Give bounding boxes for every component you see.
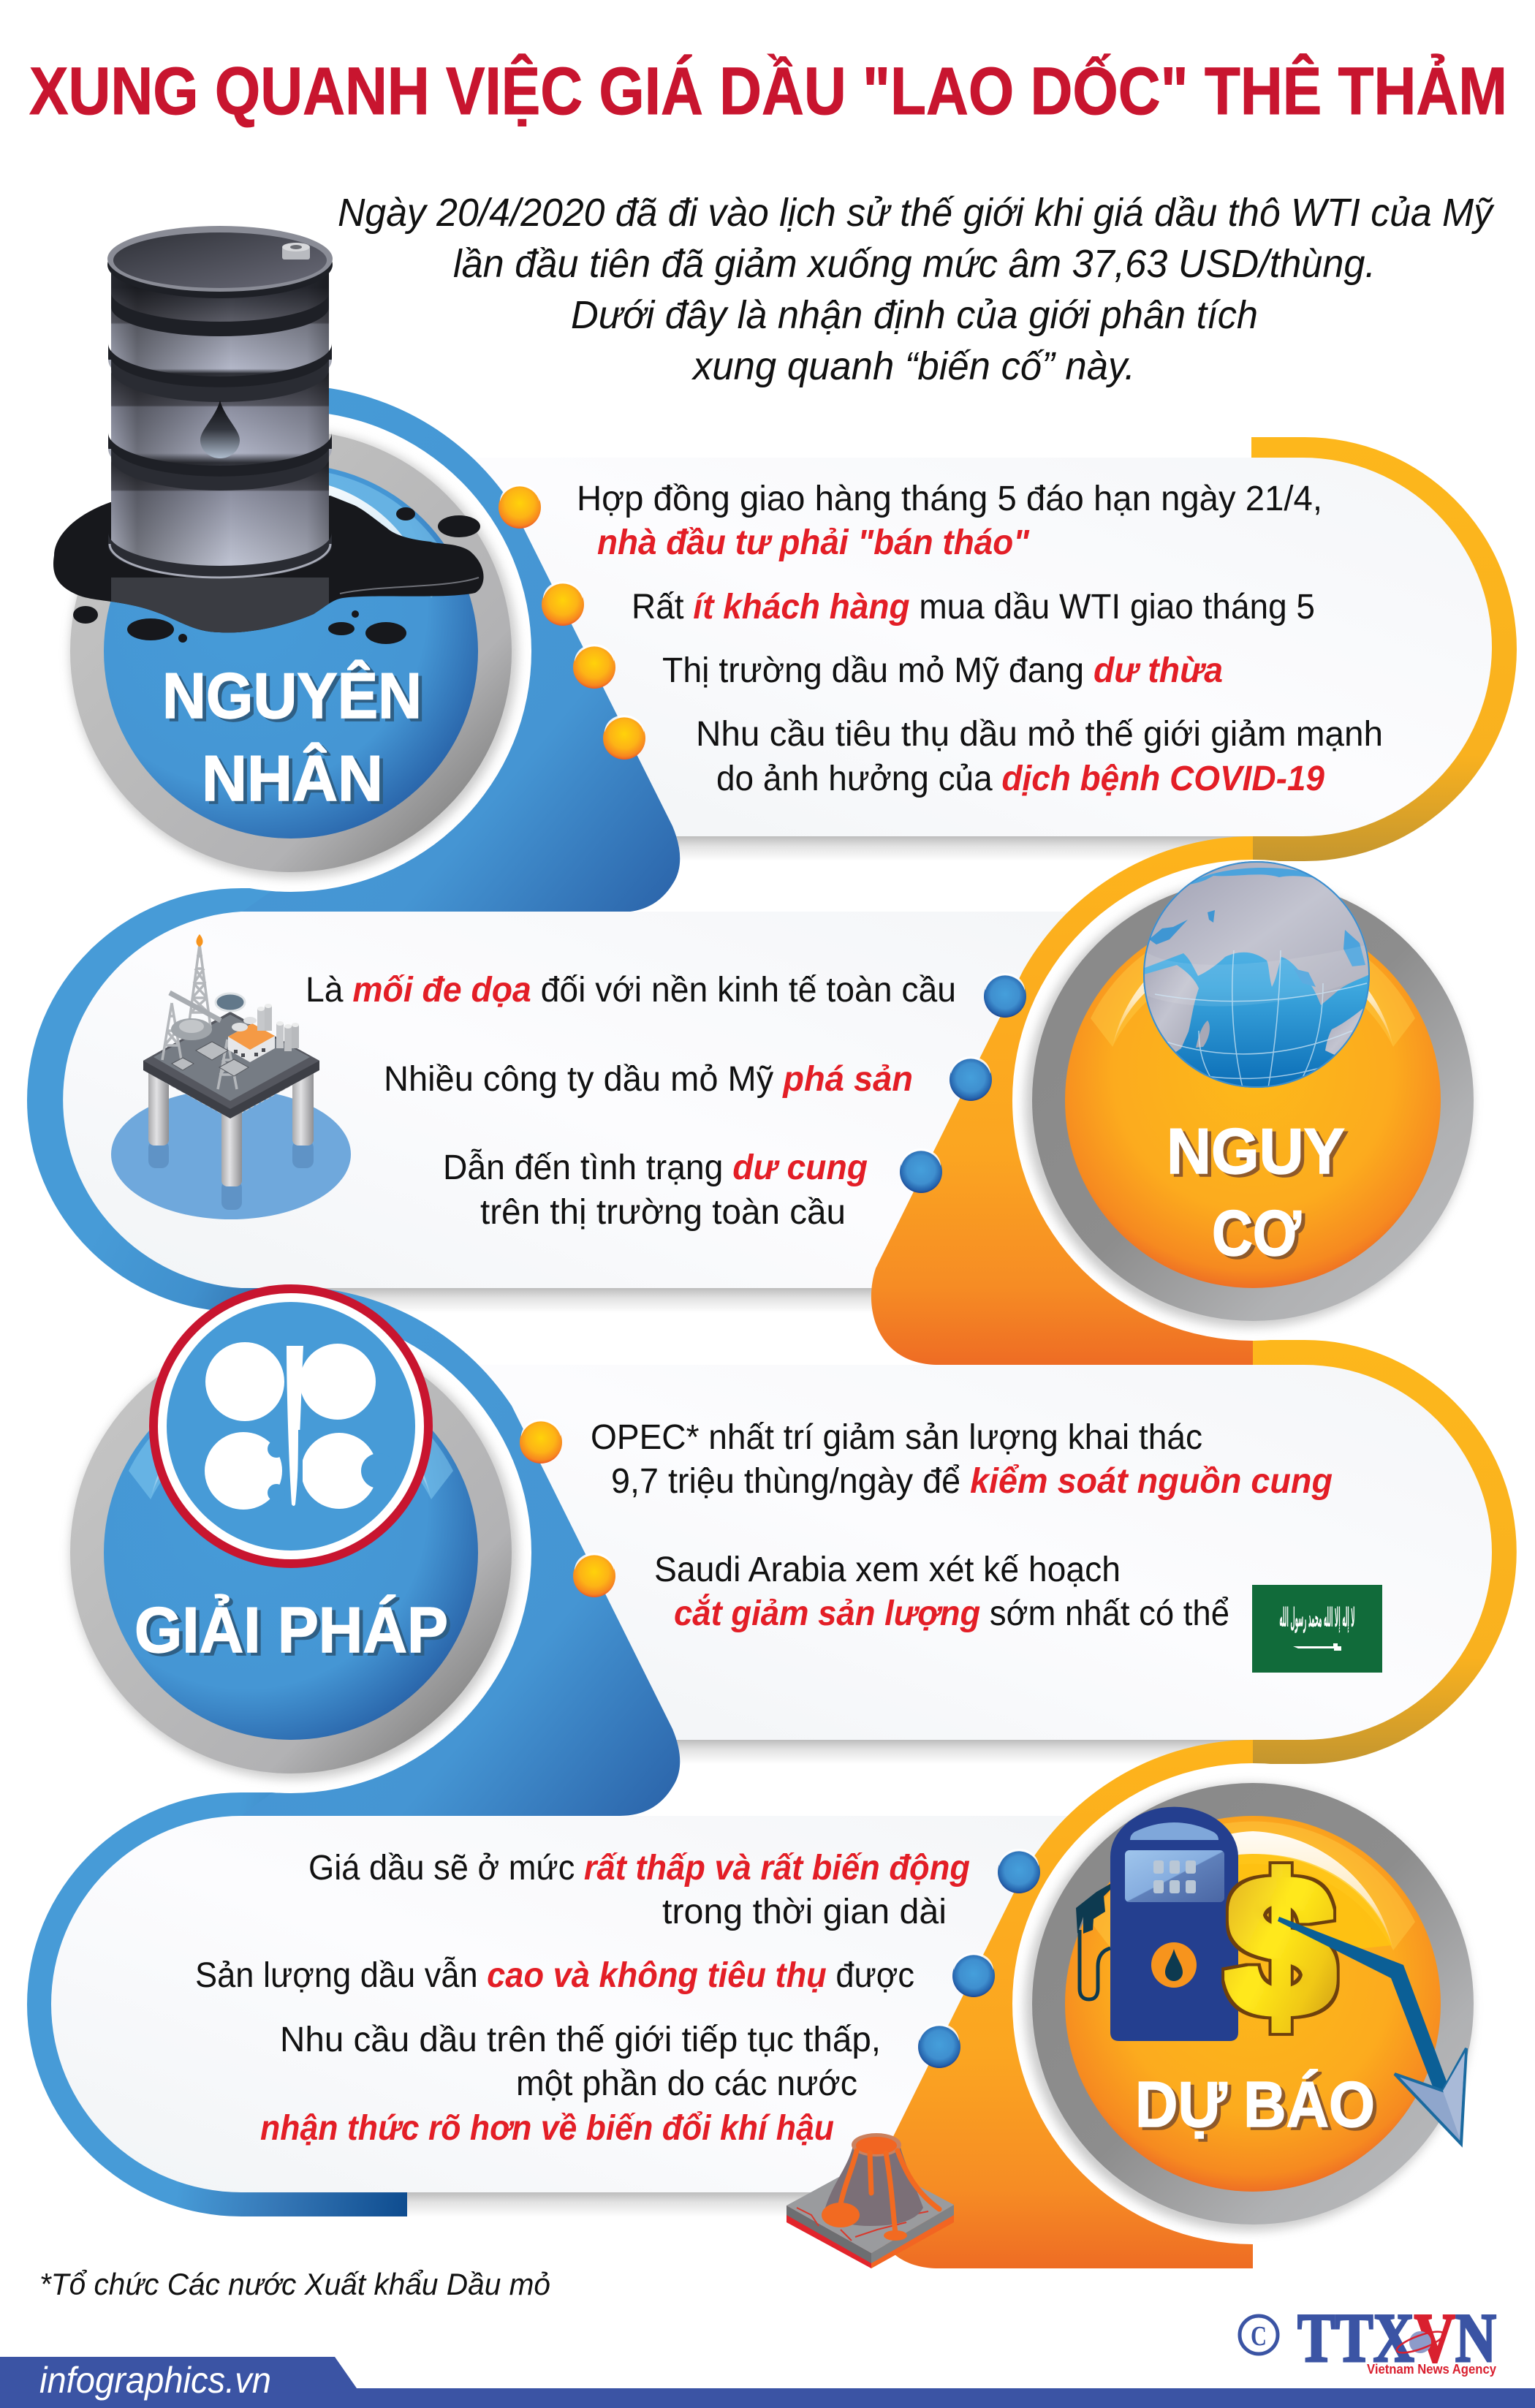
bullet list: risks [306,971,1026,1232]
bullet list: causes: Nhu cầu tiêu thụ dầu mỏ thế giới giảm mạnh [696,715,1383,754]
section: GIẢI PHÁP circle [50,1312,531,1793]
circle gloss [129,469,453,598]
circle gloss [1091,1822,1415,1960]
panel: solutions text background [468,1365,1492,1740]
bullet list: forecast [195,1849,1040,2148]
rig tanks [232,1004,299,1051]
gold outline: section 1 right edge [1250,437,1517,861]
bullet list: solutions: OPEC* nhất trí giảm sản lượng khai thác [591,1418,1202,1457]
bullet list: solutions: 9,7 triệu thùng/ngày để kiểm soát nguồn cung [611,1462,1333,1501]
bullet list: forecast: Sản lượng dầu vẫn cao và không tiêu thụ được [195,1955,914,1995]
bullet list: solutions: cắt giảm sản lượng sớm nhất có thể [674,1593,1229,1633]
panel outline: forecast blue band [27,1792,407,2216]
icon: fuel pump [1076,1807,1238,2041]
bullet list: risks: Là mối đe dọa đối với nền kinh tế toàn cầu [306,971,956,1010]
rig building [228,1023,275,1062]
section: DỰ BÁO circle [1012,1763,1493,2244]
bullet list: forecast: Nhu cầu dầu trên thế giới tiếp tục thấp, [280,2021,881,2059]
gold outline: section 3 right edge [1250,1340,1517,1764]
bullet list: solutions: Saudi Arabia xem xét kế hoạch [654,1551,1121,1589]
intro text block: Dưới đây là nhận định của giới phân tích [571,293,1258,337]
heading: GIẢI PHÁP: GIẢI PHÁP [134,1594,448,1666]
heading: NGUY CƠ: NGUY [1167,1115,1345,1187]
logo: TTXVN: Vietnam News Agency [1367,2362,1496,2377]
section: NGUYÊN NHÂN circle [50,411,531,892]
bullet list: causes: Thị trường dầu mỏ Mỹ đang dư thừa [662,651,1223,690]
rig machinery [172,1042,249,1076]
logo: copyright [1240,2316,1278,2354]
bullet list: causes: Hợp đồng giao hàng tháng 5 đáo hạn ngày 21/4, [577,480,1322,518]
intro text block: lần đầu tiên đã giảm xuống mức âm 37,63 USD/thùng. [453,242,1376,286]
panel: causes text background [468,458,1492,836]
footer bar [0,2357,1535,2408]
bullet list: risks: Nhiều công ty dầu mỏ Mỹ phá sản [384,1060,913,1099]
heading: DỰ BÁO: DỰ BÁO [1135,2068,1375,2140]
bullet list: risks: trên thị trường toàn cầu [480,1193,846,1232]
icon: volcano [787,2133,954,2268]
footer website: infographics.vn [39,2360,271,2401]
intro text block: Ngày 20/4/2020 đã đi vào lịch sử thế giới khi giá dầu thô WTI của Mỹ [338,191,1495,235]
panel shadow: causes [676,836,1250,861]
panel outline: forecast orange shape [871,1740,1253,2268]
panel shadow: solutions [676,1740,1250,1764]
intro text block [338,191,1495,388]
panel: risks text background [63,912,1082,1288]
bullet list: causes: nhà đầu tư phải "bán tháo" [597,523,1030,562]
rig derricks [162,944,237,1089]
bullet list: forecast: Giá dầu sẽ ở mức rất thấp và rất biến động [308,1849,970,1888]
heading: NGUY CƠ [1167,1115,1345,1269]
icon: Saudi Arabia flag: لا إله إلا الله محمد رسول الله [1279,1603,1355,1634]
icon: Saudi Arabia flag [1252,1585,1382,1673]
heading: NGUYÊN NHÂN [162,659,422,814]
circle gloss [129,1371,453,1499]
bullet list: causes: do ảnh hưởng của dịch bệnh COVID-19 [716,760,1324,798]
heading: NGUYÊN NHÂN: NGUYÊN [162,659,422,732]
logo: copyright: C [1251,2321,1267,2352]
footnote: *Tổ chức Các nước Xuất khẩu Dầu mỏ [39,2267,550,2301]
rig legs [148,1067,314,1210]
circle gloss [1091,918,1415,1047]
panel outline: risks blue band [27,888,307,1312]
bullet list: forecast: trong thời gian dài [662,1893,947,1931]
icon: drop on barrel [200,401,240,458]
icon: globe [1139,855,1374,1088]
panel shadow: forecast [407,2192,816,2217]
panel outline: solutions blue shape [241,1287,680,1816]
bullet list: forecast: một phần do các nước [516,2064,857,2103]
heading: NGUY CƠ: CƠ [1212,1197,1301,1269]
panel outline: causes blue shape [241,385,680,912]
rig deck [143,1012,319,1118]
panel shadow: risks [307,1288,884,1313]
intro text block: xung quanh “biến cố” này. [691,344,1135,388]
heading: NGUYÊN NHÂN: NHÂN [202,742,383,814]
icon: oil barrel [107,226,333,579]
bullet list: forecast: nhận thức rõ hơn về biến đổi khí hậu [260,2109,834,2148]
bullet list: solutions [520,1418,1333,1633]
section: NGUY CƠ circle [1012,860,1493,1341]
bullet list: causes [499,480,1383,798]
icon: oil spill [53,496,484,644]
bullet list: risks: Dẫn đến tình trạng dư cung [443,1148,868,1187]
rig helipad [216,993,245,1011]
bullet list: causes: Rất ít khách hàng mua dầu WTI giao tháng 5 [632,588,1315,626]
panel: forecast text background [51,1816,1082,2192]
arrow: falling price [1278,1917,1466,2144]
icon: oil rig [111,934,351,1219]
icon: OPEC logo [154,1289,428,1564]
logo: TTXVN: TTXVN [1297,2299,1496,2377]
icon: dollar sign: $ [1226,1836,1335,2056]
panel outline: risks orange shape [871,836,1253,1365]
